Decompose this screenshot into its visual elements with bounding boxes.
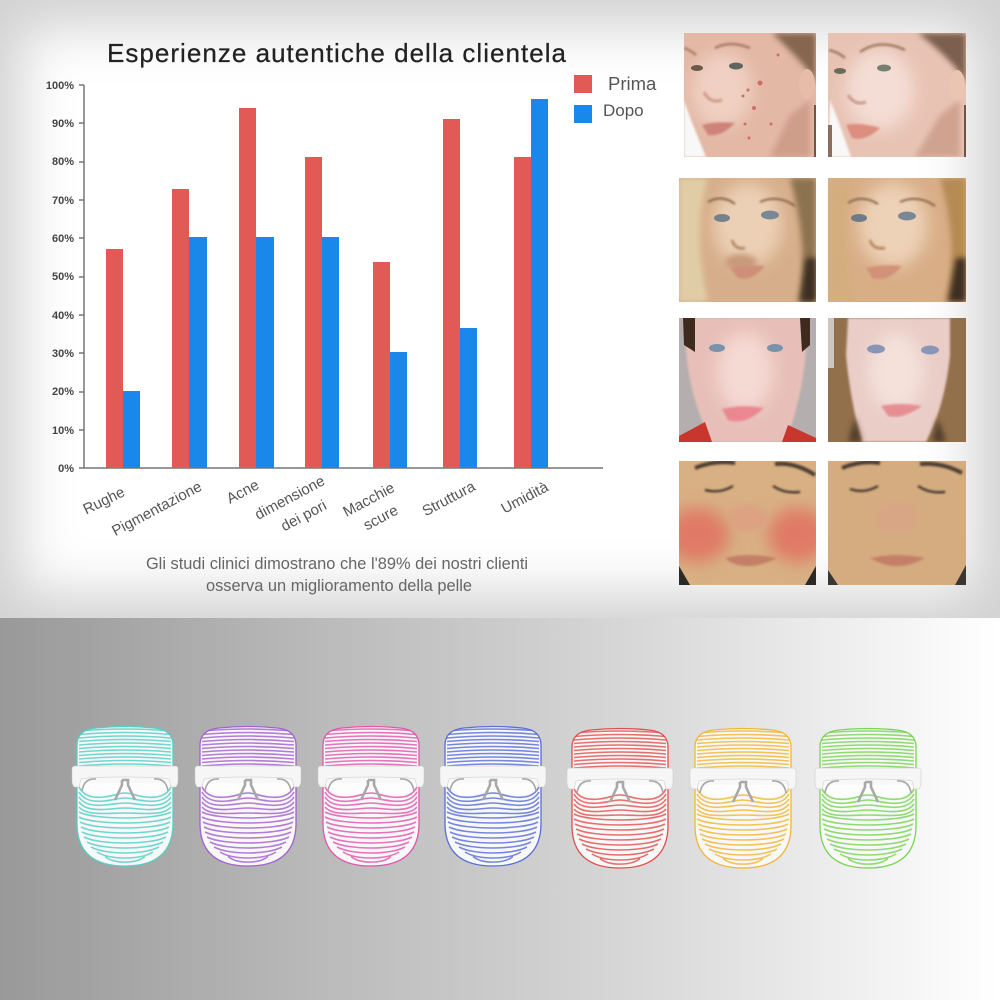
mask: red — [567, 728, 673, 868]
photo: pigmentation after — [828, 318, 966, 442]
y axis labels: 30% — [52, 348, 74, 360]
photo: redness after — [828, 461, 966, 585]
mask: yellow — [690, 728, 796, 868]
bars: Dopo — [123, 99, 548, 468]
category labels: scure — [361, 502, 401, 534]
mask: blue — [440, 726, 546, 866]
legend: Dopo — [603, 101, 644, 120]
photo: wrinkles after — [828, 178, 966, 302]
category labels: Umidità — [498, 478, 552, 517]
y axis labels — [46, 80, 74, 475]
legend: Prima — [608, 73, 657, 94]
category labels: dimensione — [252, 473, 328, 524]
y axis labels: 70% — [52, 195, 74, 207]
y axis labels: 80% — [52, 156, 74, 168]
mask: pink — [318, 726, 424, 866]
caption: Gli studi clinici dimostrano che l'89% dei nostri clienti — [146, 555, 528, 573]
mask: purple — [195, 726, 301, 866]
photo: pigmentation before — [679, 318, 816, 442]
caption — [146, 555, 528, 595]
photo: acne after — [828, 33, 966, 157]
photo: redness before — [679, 461, 816, 585]
category labels: Rughe — [80, 484, 128, 518]
bar chart — [46, 80, 603, 540]
category labels: Macchie — [340, 479, 398, 521]
photo: acne before — [684, 33, 816, 157]
y axis labels: 100% — [46, 80, 74, 92]
y axis labels: 20% — [52, 386, 74, 398]
top background panel — [0, 0, 1000, 618]
y axis labels: 50% — [52, 271, 74, 283]
photo: wrinkles before — [679, 178, 816, 302]
title: Esperienze autentiche della clientela — [107, 38, 567, 68]
category labels: Struttura — [419, 478, 479, 520]
bars: Prima — [106, 108, 531, 468]
y axis labels: 40% — [52, 310, 74, 322]
y axis labels: 0% — [58, 463, 74, 475]
category labels: dei pori — [278, 497, 330, 535]
category labels: Pigmentazione — [109, 478, 205, 540]
mask: green — [815, 728, 921, 868]
mask: cyan — [72, 726, 178, 866]
bottom gradient panel — [0, 618, 1000, 1000]
category labels: Acne — [224, 476, 262, 508]
legend — [574, 73, 657, 123]
y axis labels: 10% — [52, 425, 74, 437]
y axis labels: 60% — [52, 233, 74, 245]
y axis labels: 90% — [52, 118, 74, 130]
caption: osserva un miglioramento della pelle — [206, 577, 472, 595]
category labels — [80, 473, 552, 540]
